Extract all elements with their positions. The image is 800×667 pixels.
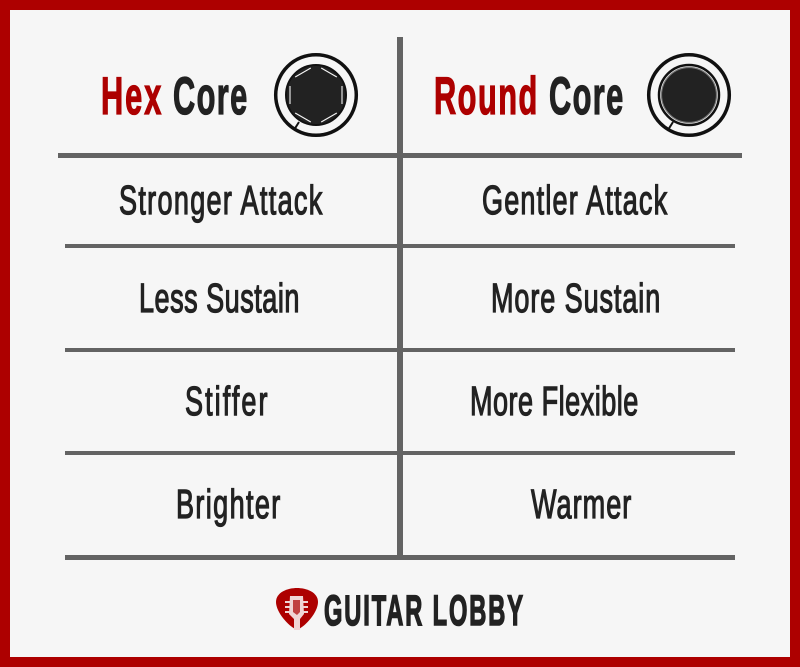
row 3: flexibility: More Flexible <box>470 380 638 424</box>
heading: Hex Core: Core <box>173 68 247 126</box>
icon: guitar pick with headstock <box>276 588 318 630</box>
row 2: sustain: More Sustain <box>491 277 660 321</box>
row 3: flexibility: Stiffer <box>185 380 267 424</box>
logo: Guitar Lobby <box>276 588 523 635</box>
row 2: sustain: Less Sustain <box>139 277 299 321</box>
heading: Hex Core <box>101 68 247 126</box>
row 2: sustain <box>139 277 660 321</box>
row 1: attack: Stronger Attack <box>119 179 323 223</box>
row 4: tone: Brighter <box>176 483 280 527</box>
heading: Round Core: Round <box>434 68 537 126</box>
heading: Hex Core: Hex <box>101 68 161 126</box>
icon: round core cross-section <box>649 55 729 135</box>
row 3: flexibility <box>185 380 638 424</box>
heading: Round Core <box>434 68 623 126</box>
heading: Round Core: Core <box>549 68 623 126</box>
row 1: attack: Gentler Attack <box>482 179 668 223</box>
table grid lines <box>58 37 742 560</box>
wordmark: GUITAR LOBBY <box>324 588 523 635</box>
icon: hex core cross-section <box>276 55 356 135</box>
row 4: tone <box>176 483 631 527</box>
row 4: tone: Warmer <box>531 483 631 527</box>
row 1: attack <box>119 179 668 223</box>
